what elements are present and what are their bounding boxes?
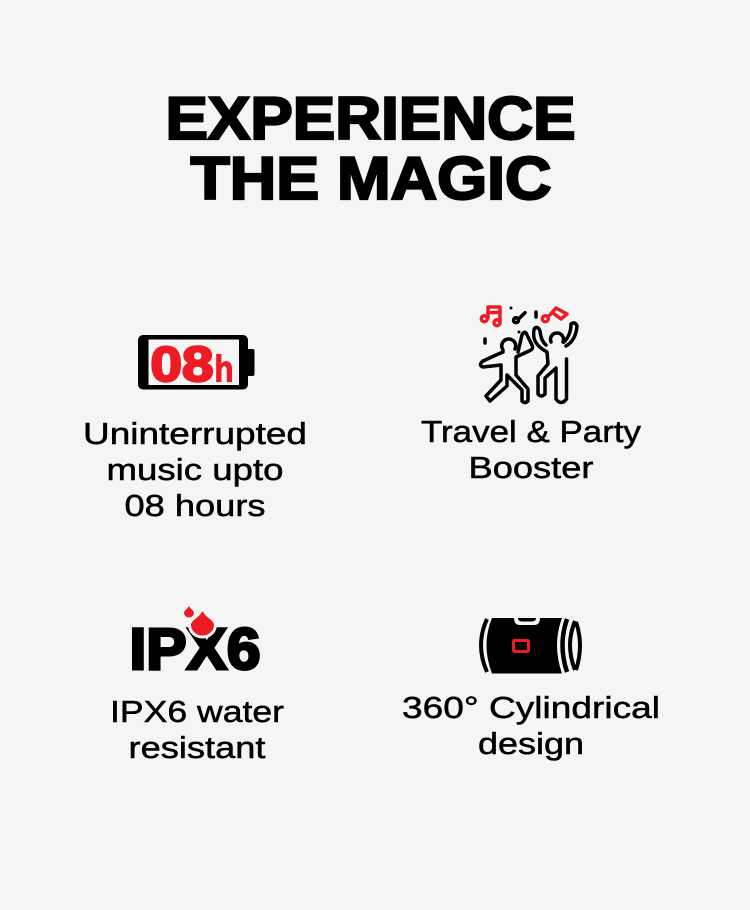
text: battery description: Uninterrupted — [83, 416, 307, 451]
title — [166, 85, 576, 212]
text: water resistance description: IPX6 water — [110, 694, 284, 729]
panel: party feature — [421, 307, 642, 485]
text: cylindrical design description — [402, 690, 660, 761]
icon: battery 08h — [138, 335, 254, 392]
icon: battery 08h: 08 — [150, 338, 214, 392]
text: cylindrical design description: 360° Cylindrical — [402, 690, 660, 725]
panel: cylindrical design feature — [402, 618, 660, 761]
text: water resistance description — [110, 694, 284, 765]
title: EXPERIENCE — [166, 85, 576, 152]
panel: water resistance feature — [110, 606, 284, 765]
title: THE MAGIC — [190, 145, 552, 212]
text: cylindrical design description: design — [478, 726, 584, 761]
text: battery description: 08 hours — [124, 488, 266, 523]
icon: dancing people with music notes — [480, 307, 577, 402]
text: water resistance description: resistant — [128, 730, 266, 765]
text: party description: Booster — [468, 450, 594, 485]
text: party description — [421, 414, 642, 485]
icon: battery 08h: h — [214, 348, 234, 390]
panel: battery feature — [83, 335, 307, 523]
text: battery description: music upto — [106, 452, 284, 487]
text: battery description — [83, 416, 307, 523]
icon: cylindrical speaker — [481, 618, 580, 674]
icon: IPX6 with water drops: IPX6 — [130, 617, 260, 682]
text: party description: Travel & Party — [421, 414, 642, 449]
